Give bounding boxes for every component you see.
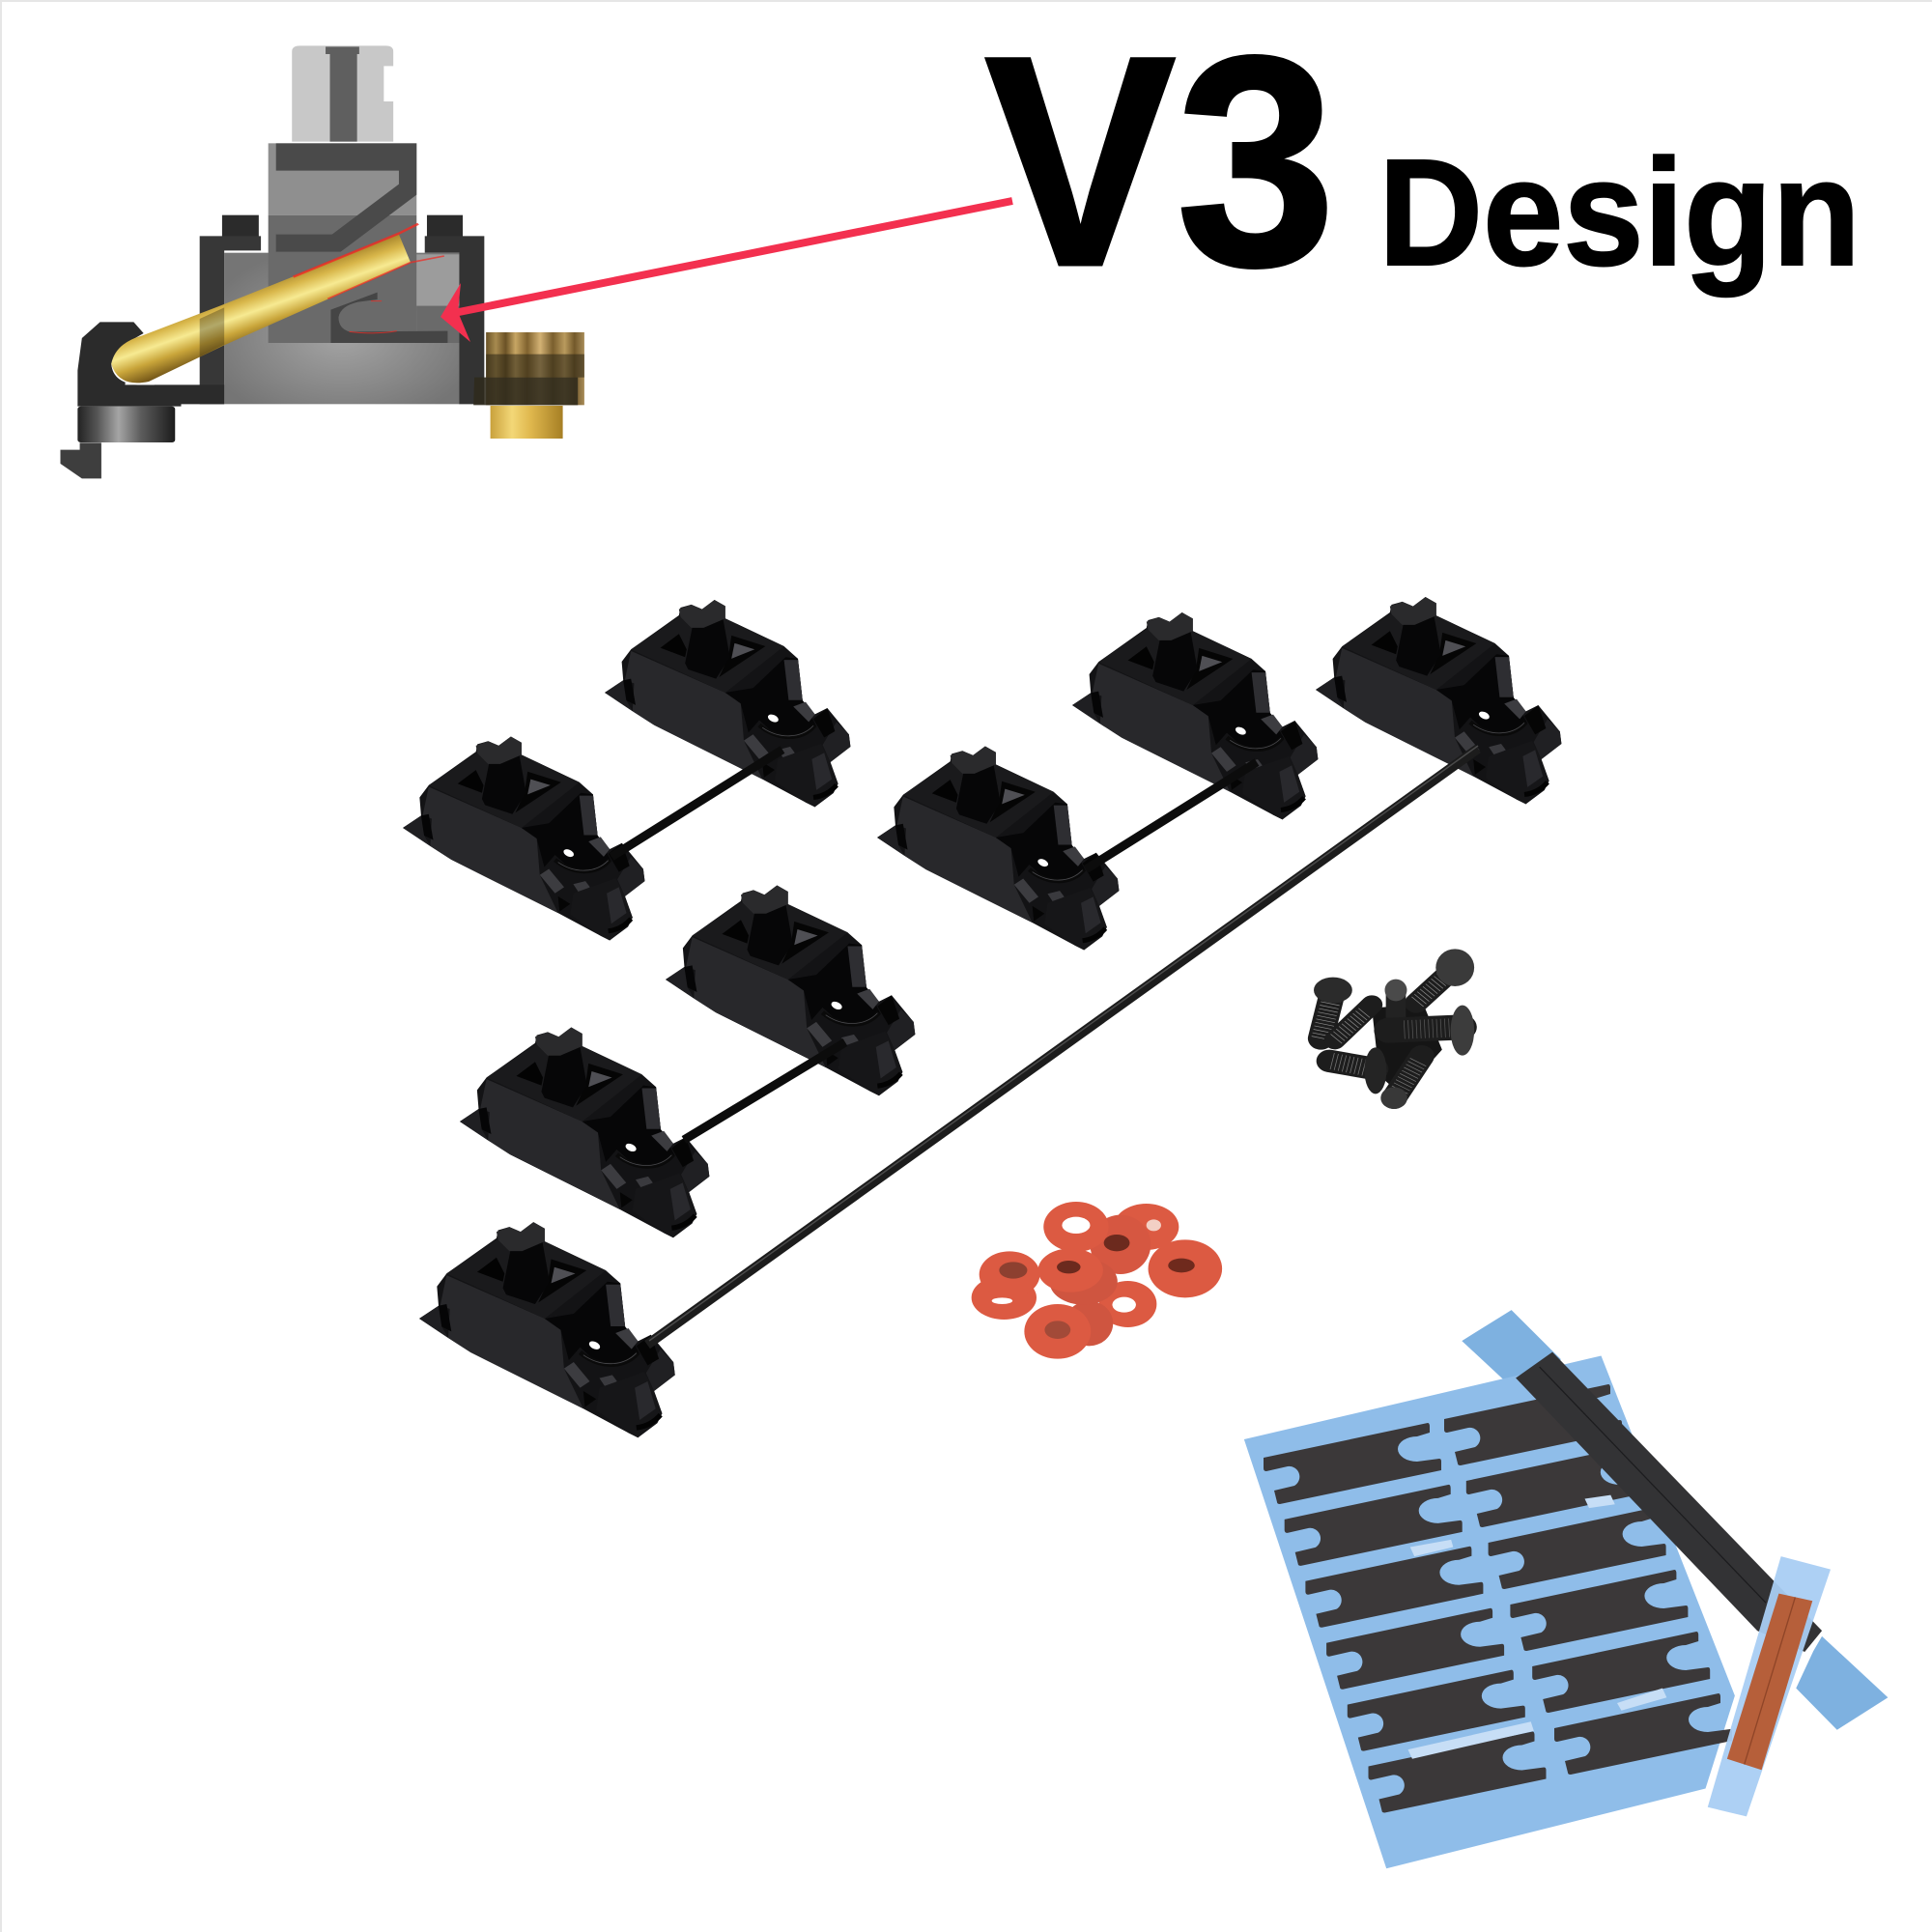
stem top xyxy=(292,45,393,142)
gold wire xyxy=(111,224,444,383)
top protective strip xyxy=(1462,1310,1561,1391)
foam pad sheet xyxy=(1244,1310,1888,1868)
red fibre washers xyxy=(972,1202,1222,1359)
black foam strip xyxy=(1516,1352,1822,1652)
stabilizer pair 3 xyxy=(460,885,915,1237)
red arrow xyxy=(440,201,1012,342)
sheen xyxy=(1408,1495,1666,1759)
stabilizer pair 2 xyxy=(877,612,1318,951)
diagram: stabilizer cross-section xyxy=(61,45,584,478)
screws xyxy=(1314,949,1474,1109)
brass nut xyxy=(473,332,584,439)
slider body xyxy=(269,143,416,252)
lower protective strip xyxy=(1796,1636,1888,1730)
left clip xyxy=(61,322,224,478)
stabilizer pair 1 xyxy=(403,600,850,941)
blue backing sheet xyxy=(1244,1355,1735,1868)
foam pads xyxy=(1264,1384,1732,1812)
long stabilizer xyxy=(419,597,1561,1437)
title: Design: Design xyxy=(1378,128,1861,298)
title: V3: V3 xyxy=(984,0,1336,328)
red-brown foam strip xyxy=(1727,1594,1812,1770)
housing xyxy=(200,215,484,404)
small blue strip xyxy=(1708,1556,1831,1816)
